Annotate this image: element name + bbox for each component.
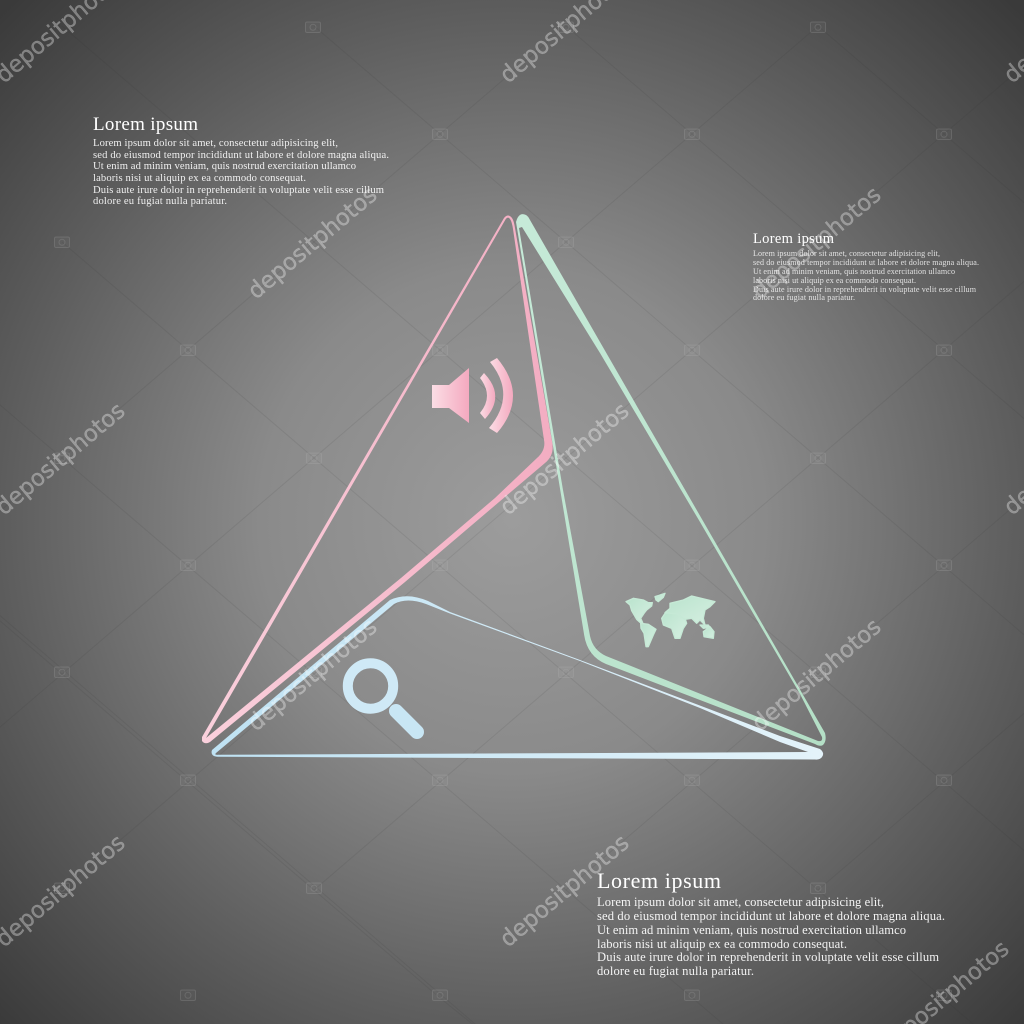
text block: bottom: laboris nisi ut aliquip ex ea commodo consequat.	[597, 937, 847, 951]
text block: right: sed do eiusmod tempor incididunt ut labore et dolore magna aliqua.	[753, 258, 979, 267]
text block: top left: dolore eu fugiat nulla pariatur.	[93, 196, 227, 207]
text block: bottom: Lorem ipsum dolor sit amet, consectetur adipisicing elit,	[597, 895, 884, 909]
text block: bottom: sed do eiusmod tempor incididunt ut labore et dolore magna aliqua.	[597, 909, 945, 923]
text block: bottom: Duis aute irure dolor in reprehenderit in voluptate velit esse cillum	[597, 950, 939, 964]
watermark: depositphotos text: depositphotos	[495, 398, 634, 521]
text block: top left: Lorem ipsum dolor sit amet, consectetur adipisicing elit,	[93, 138, 338, 149]
icon: speaker	[432, 358, 513, 433]
text block: right: Duis aute irure dolor in reprehenderit in voluptate velit esse cillum	[753, 285, 977, 294]
text block: top left: Lorem ipsum	[93, 114, 198, 135]
text block: right: dolore eu fugiat nulla pariatur.	[753, 293, 855, 302]
watermark: depositphotos text: depositphotos	[243, 614, 382, 737]
text block: bottom: dolore eu fugiat nulla pariatur.	[597, 964, 754, 978]
icon: world map	[626, 593, 715, 647]
text block: bottom: Lorem ipsum	[597, 868, 721, 893]
text block: top left: sed do eiusmod tempor incididunt ut labore et dolore magna aliqua.	[93, 150, 389, 161]
icon: magnifier	[348, 663, 417, 732]
text block: top left	[93, 114, 389, 207]
text block: right: Lorem ipsum	[753, 231, 835, 247]
panel: green triangle outline	[516, 214, 826, 746]
text block: bottom: Ut enim ad minim veniam, quis nostrud exercitation ullamco	[597, 923, 906, 937]
panel: pink triangle outline	[202, 216, 553, 743]
text block: bottom	[597, 868, 945, 978]
text block: top left: Duis aute irure dolor in reprehenderit in voluptate velit esse cillum	[93, 185, 385, 196]
text block: top left: laboris nisi ut aliquip ex ea commodo consequat.	[93, 173, 306, 184]
watermark: depositphotos text: depositphotos	[495, 830, 634, 953]
watermark: depositphotos text: depositphotos	[747, 182, 886, 305]
watermark: depositphotos text: depositphotos	[243, 182, 382, 305]
text block: top left: Ut enim ad minim veniam, quis nostrud exercitation ullamco	[93, 161, 356, 172]
watermark: depositphotos text: depositphotos	[747, 614, 886, 737]
text block: right	[753, 231, 979, 302]
text block: right: Ut enim ad minim veniam, quis nostrud exercitation ullamco	[753, 267, 955, 276]
panel: blue triangle outline	[212, 596, 823, 760]
text block: right: Lorem ipsum dolor sit amet, consectetur adipisicing elit,	[753, 249, 940, 258]
text block: right: laboris nisi ut aliquip ex ea commodo consequat.	[753, 276, 916, 285]
